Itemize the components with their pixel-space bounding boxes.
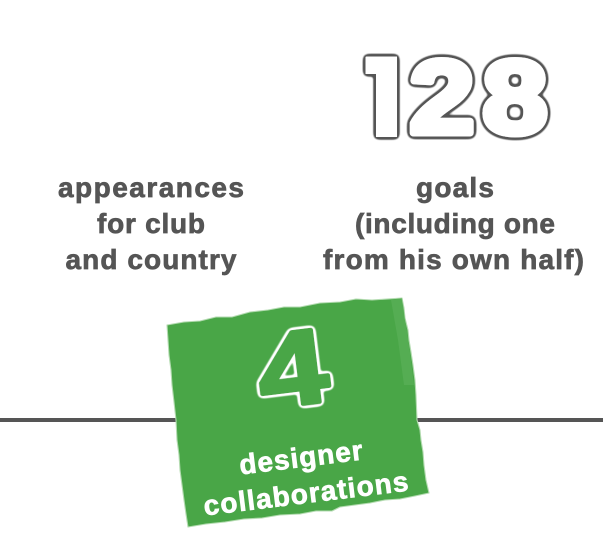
text: goals including one from his own half: goals bbox=[416, 172, 494, 203]
number: 128 goals: 1 bbox=[348, 39, 414, 155]
text: designer collaborations: collaborations bbox=[202, 466, 410, 522]
text: appearances for club and country bbox=[58, 172, 244, 275]
number: 128 goals bbox=[362, 53, 551, 141]
text: goals including one from his own half: (including one bbox=[355, 208, 555, 239]
panel: green torn paper bbox=[167, 298, 429, 527]
number: 128 goals: 8 bbox=[483, 40, 547, 156]
text: appearances for club and country: for club bbox=[97, 208, 205, 239]
horizontal line left bbox=[0, 418, 180, 422]
text: appearances for club and country: appearances bbox=[58, 172, 244, 203]
number: 128 goals: 2 bbox=[410, 40, 474, 156]
text: goals including one from his own half: from his own half) bbox=[323, 244, 584, 275]
number: 4: 4 bbox=[251, 305, 334, 432]
text: designer collaborations: designer bbox=[237, 435, 364, 481]
text: designer collaborations bbox=[202, 435, 410, 522]
paper shape bbox=[167, 298, 429, 527]
horizontal line right bbox=[414, 418, 603, 422]
text: goals including one from his own half bbox=[323, 172, 584, 275]
paper crease highlight bbox=[391, 298, 414, 385]
text: appearances for club and country: and country bbox=[66, 244, 237, 275]
